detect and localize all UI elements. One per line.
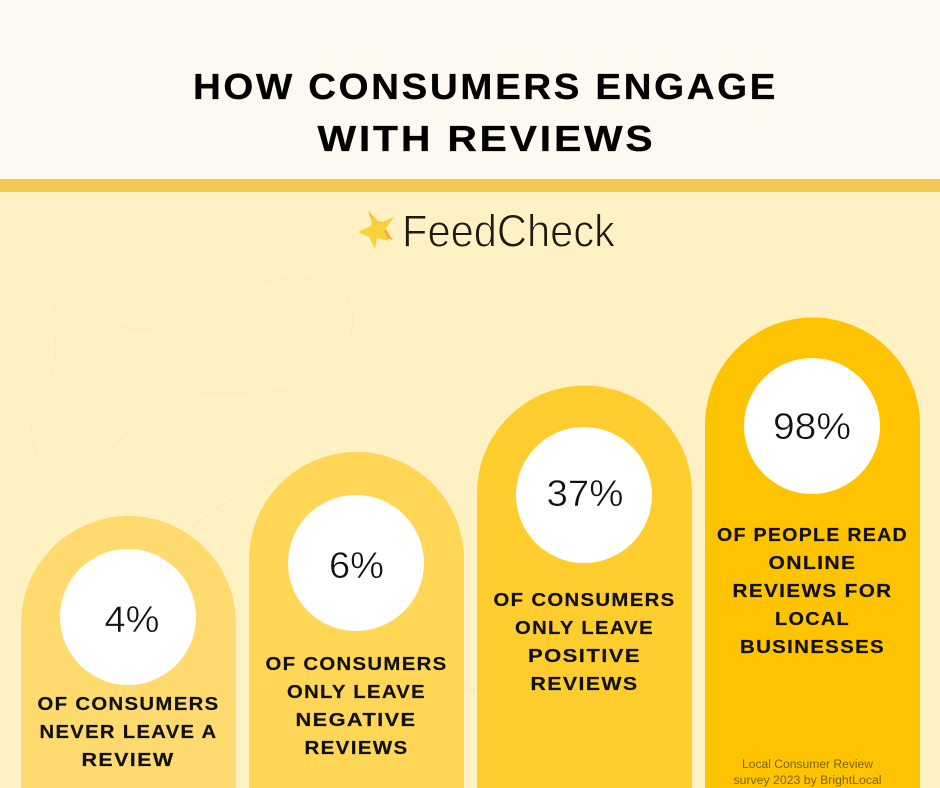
label: REVIEW	[82, 749, 174, 770]
title	[193, 66, 778, 159]
column: 37 percent	[477, 386, 692, 788]
title: WITH REVIEWS	[318, 118, 656, 159]
label: ONLY LEAVE	[287, 681, 426, 702]
label: OF CONSUMERS	[266, 653, 448, 674]
label: NEVER LEAVE A	[40, 721, 218, 742]
source note: Local Consumer Review	[742, 759, 874, 771]
header panel	[0, 0, 940, 180]
title: HOW CONSUMERS ENGAGE	[193, 66, 778, 107]
label: ONLINE	[768, 552, 856, 573]
logo: FeedCheck	[358, 206, 615, 256]
label	[266, 653, 448, 758]
circle	[60, 549, 196, 685]
label: OF CONSUMERS	[38, 693, 219, 714]
label: ONLY LEAVE	[515, 617, 654, 638]
label: OF PEOPLE READ	[717, 524, 908, 545]
source note: survey 2023 by BrightLocal	[734, 775, 882, 787]
background squiggle left	[32, 267, 353, 467]
number: 6%	[329, 545, 384, 586]
label: REVIEWS	[530, 673, 638, 694]
label: OF CONSUMERS	[494, 589, 676, 610]
background squiggle right	[552, 206, 871, 385]
number: 4%	[104, 599, 160, 640]
label	[494, 589, 676, 694]
circle	[288, 495, 424, 631]
label: REVIEWS	[304, 737, 408, 758]
label: BUSINESSES	[740, 636, 885, 657]
label: REVIEWS FOR	[732, 580, 892, 601]
column: 6 percent	[249, 452, 464, 788]
source note	[734, 759, 882, 787]
column: 98 percent	[705, 318, 920, 788]
number: 37%	[546, 473, 624, 514]
header divider band	[0, 179, 940, 192]
column: 4 percent	[21, 516, 236, 788]
circle	[744, 358, 880, 494]
label: POSITIVE	[528, 645, 641, 666]
icon: star	[358, 210, 394, 249]
number: 98%	[773, 406, 851, 447]
label	[717, 524, 908, 657]
background squiggle lower	[160, 478, 490, 689]
circle	[516, 427, 652, 563]
label: LOCAL	[775, 608, 850, 629]
wordmark: FeedCheck	[402, 206, 615, 256]
label: NEGATIVE	[296, 709, 416, 730]
label	[38, 693, 219, 770]
